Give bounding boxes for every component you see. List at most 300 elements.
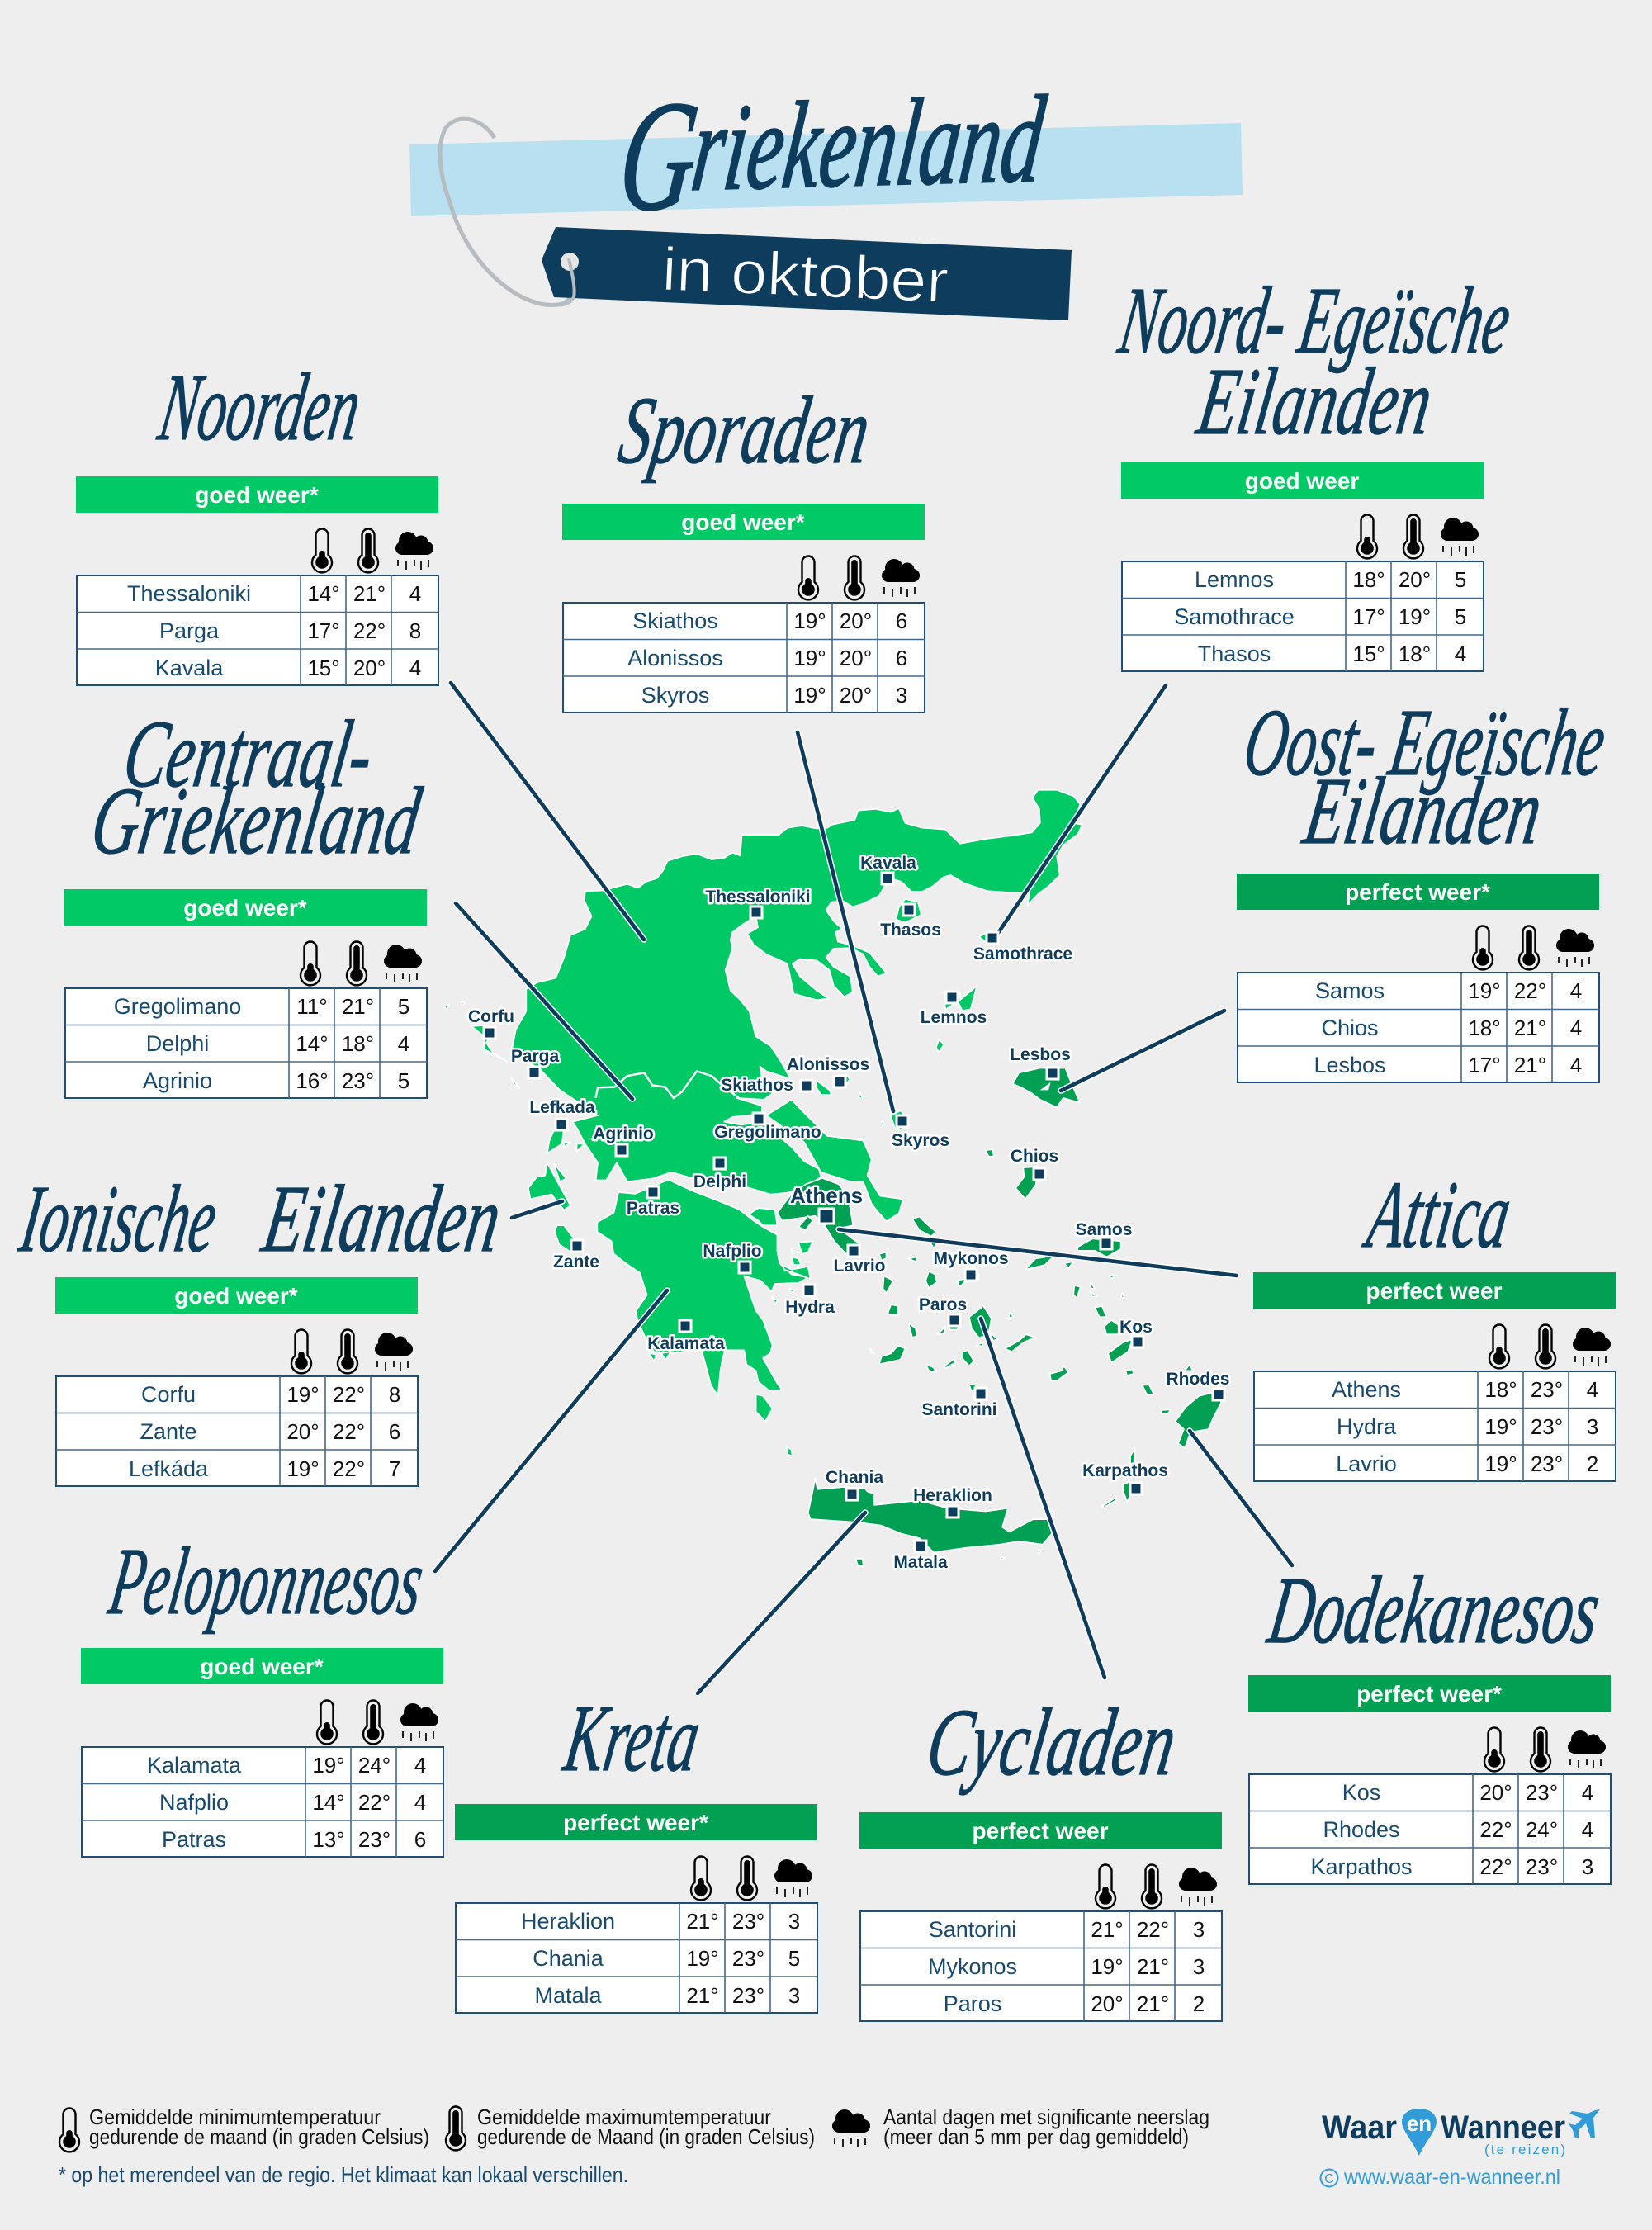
table: 21° [1514,1016,1546,1040]
heading: Ionische Eilanden: Ionische [13,1167,224,1272]
table: 23° [732,1909,764,1934]
city: Chania: Chania [826,1468,883,1487]
table: 4 [1570,1016,1582,1040]
table: 20° [840,608,872,633]
table: 3 [1582,1854,1593,1879]
city: Thessaloniki: Thessaloniki [705,888,811,907]
main title: G [612,69,706,244]
Peloponnese and nearby light islands [555,1180,812,1456]
legend text: rain: Aantal dagen met significante neerslag [883,2105,1209,2129]
table: 21° [686,1983,719,2008]
logo word: Waar: Waar [1322,2109,1397,2146]
icons [301,941,422,985]
table [1122,561,1484,671]
table: 20° [840,683,872,708]
table: Matala [534,1983,603,2008]
weather bar [64,889,427,926]
table: 23° [1526,1780,1558,1805]
table: 24° [1526,1817,1558,1842]
city: Alonissos: Alonissos [787,1055,869,1074]
city: Agrinio [593,1124,654,1156]
city markers and labels [468,854,1230,1572]
table: 20° [1091,1991,1124,2016]
icons [1357,515,1479,558]
table: Santorini [929,1917,1016,1942]
city: Athens: Athens [790,1183,863,1208]
table: 19° [793,646,826,670]
table: 13° [312,1827,345,1852]
Lesbos gulf [1040,1082,1051,1090]
city: Lesbos [1010,1045,1071,1079]
city: Zante: Zante [553,1252,599,1271]
table: 19° [1484,1414,1517,1439]
table [860,1911,1222,2021]
table: 7 [389,1456,400,1481]
table: 3 [1193,1917,1205,1942]
panel: Ionische Eilanden [55,1277,418,1486]
city: Lemnos: Lemnos [921,1008,987,1027]
table: 22° [1479,1854,1512,1879]
table: 18° [1352,567,1385,592]
city: Matala [893,1541,948,1572]
table: Gregolimano [114,994,241,1019]
panel: Sporaden [562,504,925,713]
map of Greece [444,790,1221,1567]
weather bar: goed weer* [681,509,805,535]
table: 23° [342,1068,374,1093]
table: 14° [312,1790,345,1815]
website: www.waar-en-wanneer.nl [1343,2166,1560,2189]
city: Chios [1011,1147,1058,1180]
city: Lefkada: Lefkada [529,1098,595,1117]
table: 18° [1484,1377,1517,1402]
panel: Kreta [455,1804,817,2013]
heading: Cycladen: Cycladen [921,1690,1183,1796]
line: Cycladen [981,1319,1105,1678]
main title: riekenland [686,70,1052,217]
weather bar: goed weer* [174,1283,298,1309]
table: Kavala [155,656,224,680]
city: Gregolimano: Gregolimano [714,1123,821,1142]
table: 3 [896,683,907,708]
city: Skyros [892,1115,949,1150]
table: 6 [414,1827,426,1852]
city: Chios: Chios [1011,1147,1058,1166]
copyright icon: C [1324,2172,1334,2186]
table: Samos [1315,978,1385,1003]
icons [317,1701,438,1744]
table: 22° [333,1382,365,1407]
city: Chania [826,1468,883,1500]
table: 24° [358,1753,391,1778]
table: 21° [1137,1954,1169,1979]
table: Mykonos [928,1954,1017,1979]
table [563,603,925,713]
table: 19° [793,608,826,633]
copyright icon [1321,2170,1337,2186]
table: Athens [1332,1377,1401,1402]
table: 18° [1399,642,1431,666]
city: Santorini: Santorini [921,1400,997,1419]
legend text: maximum temperature: Gemiddelde maximumtemperatuur [477,2105,771,2129]
weather bar [562,504,925,540]
heading: Noord-Egeische Eilanden: Eilanden [1190,349,1439,455]
legend icon: rain [832,2109,870,2147]
table: 3 [788,1909,800,1934]
table: Hydra [1337,1414,1397,1439]
city: Skyros: Skyros [892,1131,949,1150]
table: 4 [1570,978,1582,1003]
panel: Noord-Egeische Eilanden [1121,462,1484,671]
city: Patras [627,1186,679,1218]
table: 6 [389,1419,400,1444]
table: Lefkáda [129,1456,209,1481]
table: Zante [140,1419,197,1444]
table: 19° [686,1946,719,1971]
table: Paros [944,1991,1001,2016]
logo word: Wanneer: Wanneer [1441,2109,1565,2146]
city: Paros: Paros [919,1295,967,1314]
table: 8 [409,618,421,643]
line: Dodekanesos [1190,1431,1292,1565]
table: 3 [788,1983,800,2008]
weather bar: perfect weer* [1356,1681,1502,1707]
table: 20° [286,1419,320,1444]
weather bar [1121,462,1484,499]
table: 23° [1526,1854,1558,1879]
table: 5 [1455,604,1466,629]
table: 23° [1531,1451,1563,1476]
heading: Oost-Egeische Eilanden: Eilanden [1297,759,1549,864]
city: Alonissos [787,1055,869,1087]
city: Agrinio: Agrinio [593,1124,654,1143]
Attica, Crete and Aegean islands, perfect weather [777,1178,1221,1567]
table: 19° [793,683,826,708]
table: 18° [342,1031,374,1056]
city: Mykonos: Mykonos [933,1249,1009,1268]
table: 19° [1468,978,1501,1003]
city: Kalamata: Kalamata [647,1334,725,1353]
table: Nafplio [159,1790,229,1815]
panel: Peloponnesos [81,1648,443,1857]
city: Heraklion [913,1486,992,1517]
table: Chania [533,1946,604,1971]
city: Karpathos [1082,1461,1168,1494]
table: 20° [353,656,386,680]
legend icon: maximum temperature [446,2107,466,2150]
table [82,1747,443,1857]
table: 4 [1582,1780,1593,1805]
table: 5 [398,1068,409,1093]
city: Paros [919,1295,967,1326]
table: 5 [788,1946,800,1971]
table: Agrinio [143,1068,212,1093]
city: Kos: Kos [1119,1318,1153,1337]
table: 3 [1193,1954,1205,1979]
table: Lemnos [1195,567,1274,592]
table: 19° [1484,1451,1517,1476]
table: 23° [1531,1414,1563,1439]
weather bar [1248,1675,1611,1712]
line: Oost-Egeische Eilanden [1061,1011,1224,1091]
table: 5 [1455,567,1466,592]
city: Kalamata [647,1320,725,1353]
table: 19° [1091,1954,1124,1979]
table: Kalamata [147,1753,242,1778]
table: 20° [1399,567,1431,592]
city: Hydra: Hydra [785,1298,835,1317]
table: Parga [159,618,220,643]
legend text: minimum temperature: Gemiddelde minimumtemperatuur [89,2105,381,2129]
table: 20° [1479,1780,1512,1805]
icons [798,556,920,599]
table [456,1903,817,2013]
table: 19° [1399,604,1431,629]
legend icon: minimum temperature [59,2109,79,2152]
weather bar [1253,1272,1616,1309]
city: Thasos: Thasos [880,921,941,940]
logo icon: plane [1569,2109,1600,2138]
icons [691,1856,812,1900]
table: 20° [840,646,872,670]
city: Samothrace: Samothrace [973,945,1072,963]
table: 21° [353,581,386,606]
city: Karpathos: Karpathos [1082,1461,1168,1480]
table: 4 [1582,1817,1593,1842]
logo tagline: (te reizen) [1484,2142,1565,2157]
weather bar [81,1648,443,1684]
city: Lesbos: Lesbos [1010,1045,1071,1064]
table: Rhodes [1323,1817,1400,1842]
panel: Noorden [76,476,438,685]
table: 5 [398,994,409,1019]
light blue band [409,123,1243,216]
table: Heraklion [521,1909,615,1934]
table: 6 [896,608,907,633]
table: 4 [414,1753,426,1778]
table: Skyros [641,683,709,708]
table: 22° [333,1419,365,1444]
table: 22° [353,618,386,643]
table: Skiathos [632,608,718,633]
icons [1473,926,1594,969]
heading: Attica: Attica [1358,1162,1517,1268]
heading: Ionische Eilanden: Eilanden [256,1167,508,1272]
table [65,988,427,1098]
city: Nafplio [703,1242,762,1273]
table: 22° [358,1790,391,1815]
subtitle: in oktober [660,234,950,315]
heading: Oost-Egeische Eilanden [1238,690,1612,864]
table: Corfu [141,1382,196,1407]
table: Karpathos [1310,1854,1413,1879]
line: Kreta [698,1513,865,1693]
weather bar [76,476,438,513]
city: Samothrace [973,932,1072,963]
table: 23° [732,1946,764,1971]
table [1238,973,1599,1082]
city: Patras: Patras [627,1199,679,1218]
city: Skiathos: Skiathos [721,1076,793,1095]
city: Lefkada [529,1098,595,1130]
title banner [409,60,1243,320]
table: 17° [1468,1053,1501,1077]
legend text: minimum temperature: gedurende de maand (in graden Celsius) [89,2124,429,2149]
city: Heraklion: Heraklion [913,1486,992,1505]
table: 4 [1455,642,1466,666]
city: Parga [511,1047,559,1078]
panel: Centraal-Griekenland [64,889,427,1098]
city: Nafplio: Nafplio [703,1242,762,1261]
southern part of the map [555,1178,1221,1567]
table: 2 [1587,1451,1598,1476]
city: Parga: Parga [511,1047,559,1066]
table: 4 [1570,1053,1582,1077]
city: Santorini [921,1388,997,1419]
city: Corfu [468,1007,514,1039]
city: Gregolimano [714,1113,821,1142]
weather bar [859,1812,1222,1849]
legend [59,2105,1209,2152]
heading: Noord-Egeische Eilanden [1112,268,1517,455]
table: 17° [1352,604,1385,629]
table: 22° [1479,1817,1512,1842]
table: 3 [1587,1414,1598,1439]
table: 14° [307,581,340,606]
table: 21° [686,1909,719,1934]
city: Athens [790,1183,863,1224]
callout lines [435,683,1292,1693]
table: 14° [296,1031,329,1056]
logo pin [1402,2109,1437,2156]
table: 15° [1352,642,1385,666]
line: Attica [839,1229,1237,1276]
table: 4 [1587,1377,1598,1402]
weather bar: goed weer* [195,482,319,508]
city: Zante [553,1240,599,1271]
table: 22° [333,1456,365,1481]
table: Lavrio [1336,1451,1397,1476]
table: 22° [1137,1917,1169,1942]
legend text: rain [883,2105,1209,2149]
city: Rhodes: Rhodes [1166,1370,1230,1389]
weather bar: perfect weer [1366,1278,1503,1304]
weather bar [55,1277,418,1314]
table: 23° [358,1827,391,1852]
logo: Waar en Wanneer [1321,2109,1600,2189]
table: Samothrace [1174,604,1295,629]
table: 19° [312,1753,345,1778]
table: 16° [296,1068,329,1093]
line: Sporaden [798,732,893,1111]
table [1249,1774,1611,1884]
icons [1096,1864,1217,1908]
logo pin: en [1407,2111,1432,2136]
city: Samos [1076,1220,1132,1249]
gray tag string [440,119,574,305]
mainland and islands, western part [444,790,1082,1221]
table [1254,1371,1616,1481]
legend text: minimum temperature [89,2105,429,2149]
table: 15° [307,656,340,680]
heading: Noorden: Noorden [152,355,367,461]
table: 19° [286,1456,320,1481]
weather bar: perfect weer [973,1818,1109,1844]
city: Lavrio [833,1245,886,1276]
icons [1484,1727,1606,1771]
table: 23° [732,1983,764,2008]
legend text: maximum temperature [477,2105,815,2149]
table: 23° [1531,1377,1563,1402]
string end [557,258,575,305]
panel: Dodekanesos [1248,1675,1611,1884]
table: 11° [296,994,328,1019]
city: Matala: Matala [893,1553,948,1572]
table: Patras [162,1827,226,1852]
table: 4 [414,1790,426,1815]
table: Lesbos [1314,1053,1386,1077]
icons [291,1329,413,1373]
table: 19° [286,1382,320,1407]
city: Delphi [693,1158,746,1191]
city: Samos: Samos [1076,1220,1132,1239]
weather bar: goed weer* [200,1654,324,1679]
table [77,575,438,685]
icons [312,528,433,572]
Lesbos and Chios, perfect weather [985,1068,1080,1199]
line: Ionische Eilanden [512,1201,562,1218]
weather bar [1237,874,1599,910]
line: Peloponnesos [435,1290,667,1571]
table: 6 [896,646,907,670]
table: 21° [1091,1917,1124,1942]
table: Kos [1342,1780,1380,1805]
table: 4 [409,581,421,606]
heading: Centraal-Griekenland [85,702,428,874]
weather bar [455,1804,817,1840]
weather bar: goed weer* [183,895,307,921]
table: 18° [1468,1016,1501,1040]
weather bar: goed weer [1245,468,1359,494]
line: Noorden [451,683,644,940]
legend text: maximum temperature: gedurende de Maand (in graden Celsius) [477,2124,815,2149]
city: Thessaloniki [705,888,811,918]
city: Kos [1119,1318,1153,1347]
table [56,1376,418,1486]
line: Centraal-Griekenland [456,903,632,1099]
heading: Centraal-Griekenland: Centraal- [117,702,380,807]
table: Thessaloniki [127,581,251,606]
table: 22° [1514,978,1546,1003]
city: Thasos [880,904,941,940]
city: Hydra [785,1285,835,1317]
panel: Cycladen [859,1812,1222,2021]
heading: Ionische Eilanden [13,1167,508,1272]
heading: Peloponnesos: Peloponnesos [102,1529,430,1635]
heading: Sporaden: Sporaden [613,378,877,484]
Evia and light islands [444,899,1000,1221]
footnote: * op het merendeel van de regio. Het klimaat kan lokaal verschillen. [59,2162,628,2187]
table: Alonissos [627,646,723,670]
table: 21° [342,994,374,1019]
weather bar: perfect weer* [1345,879,1490,905]
northern and central mainland [511,790,1082,1195]
line: Noord-Egeische Eilanden [998,685,1166,933]
tag hole [561,253,579,271]
city: Kavala: Kavala [860,854,916,873]
icons [1489,1324,1611,1368]
table: Chios [1321,1016,1379,1040]
